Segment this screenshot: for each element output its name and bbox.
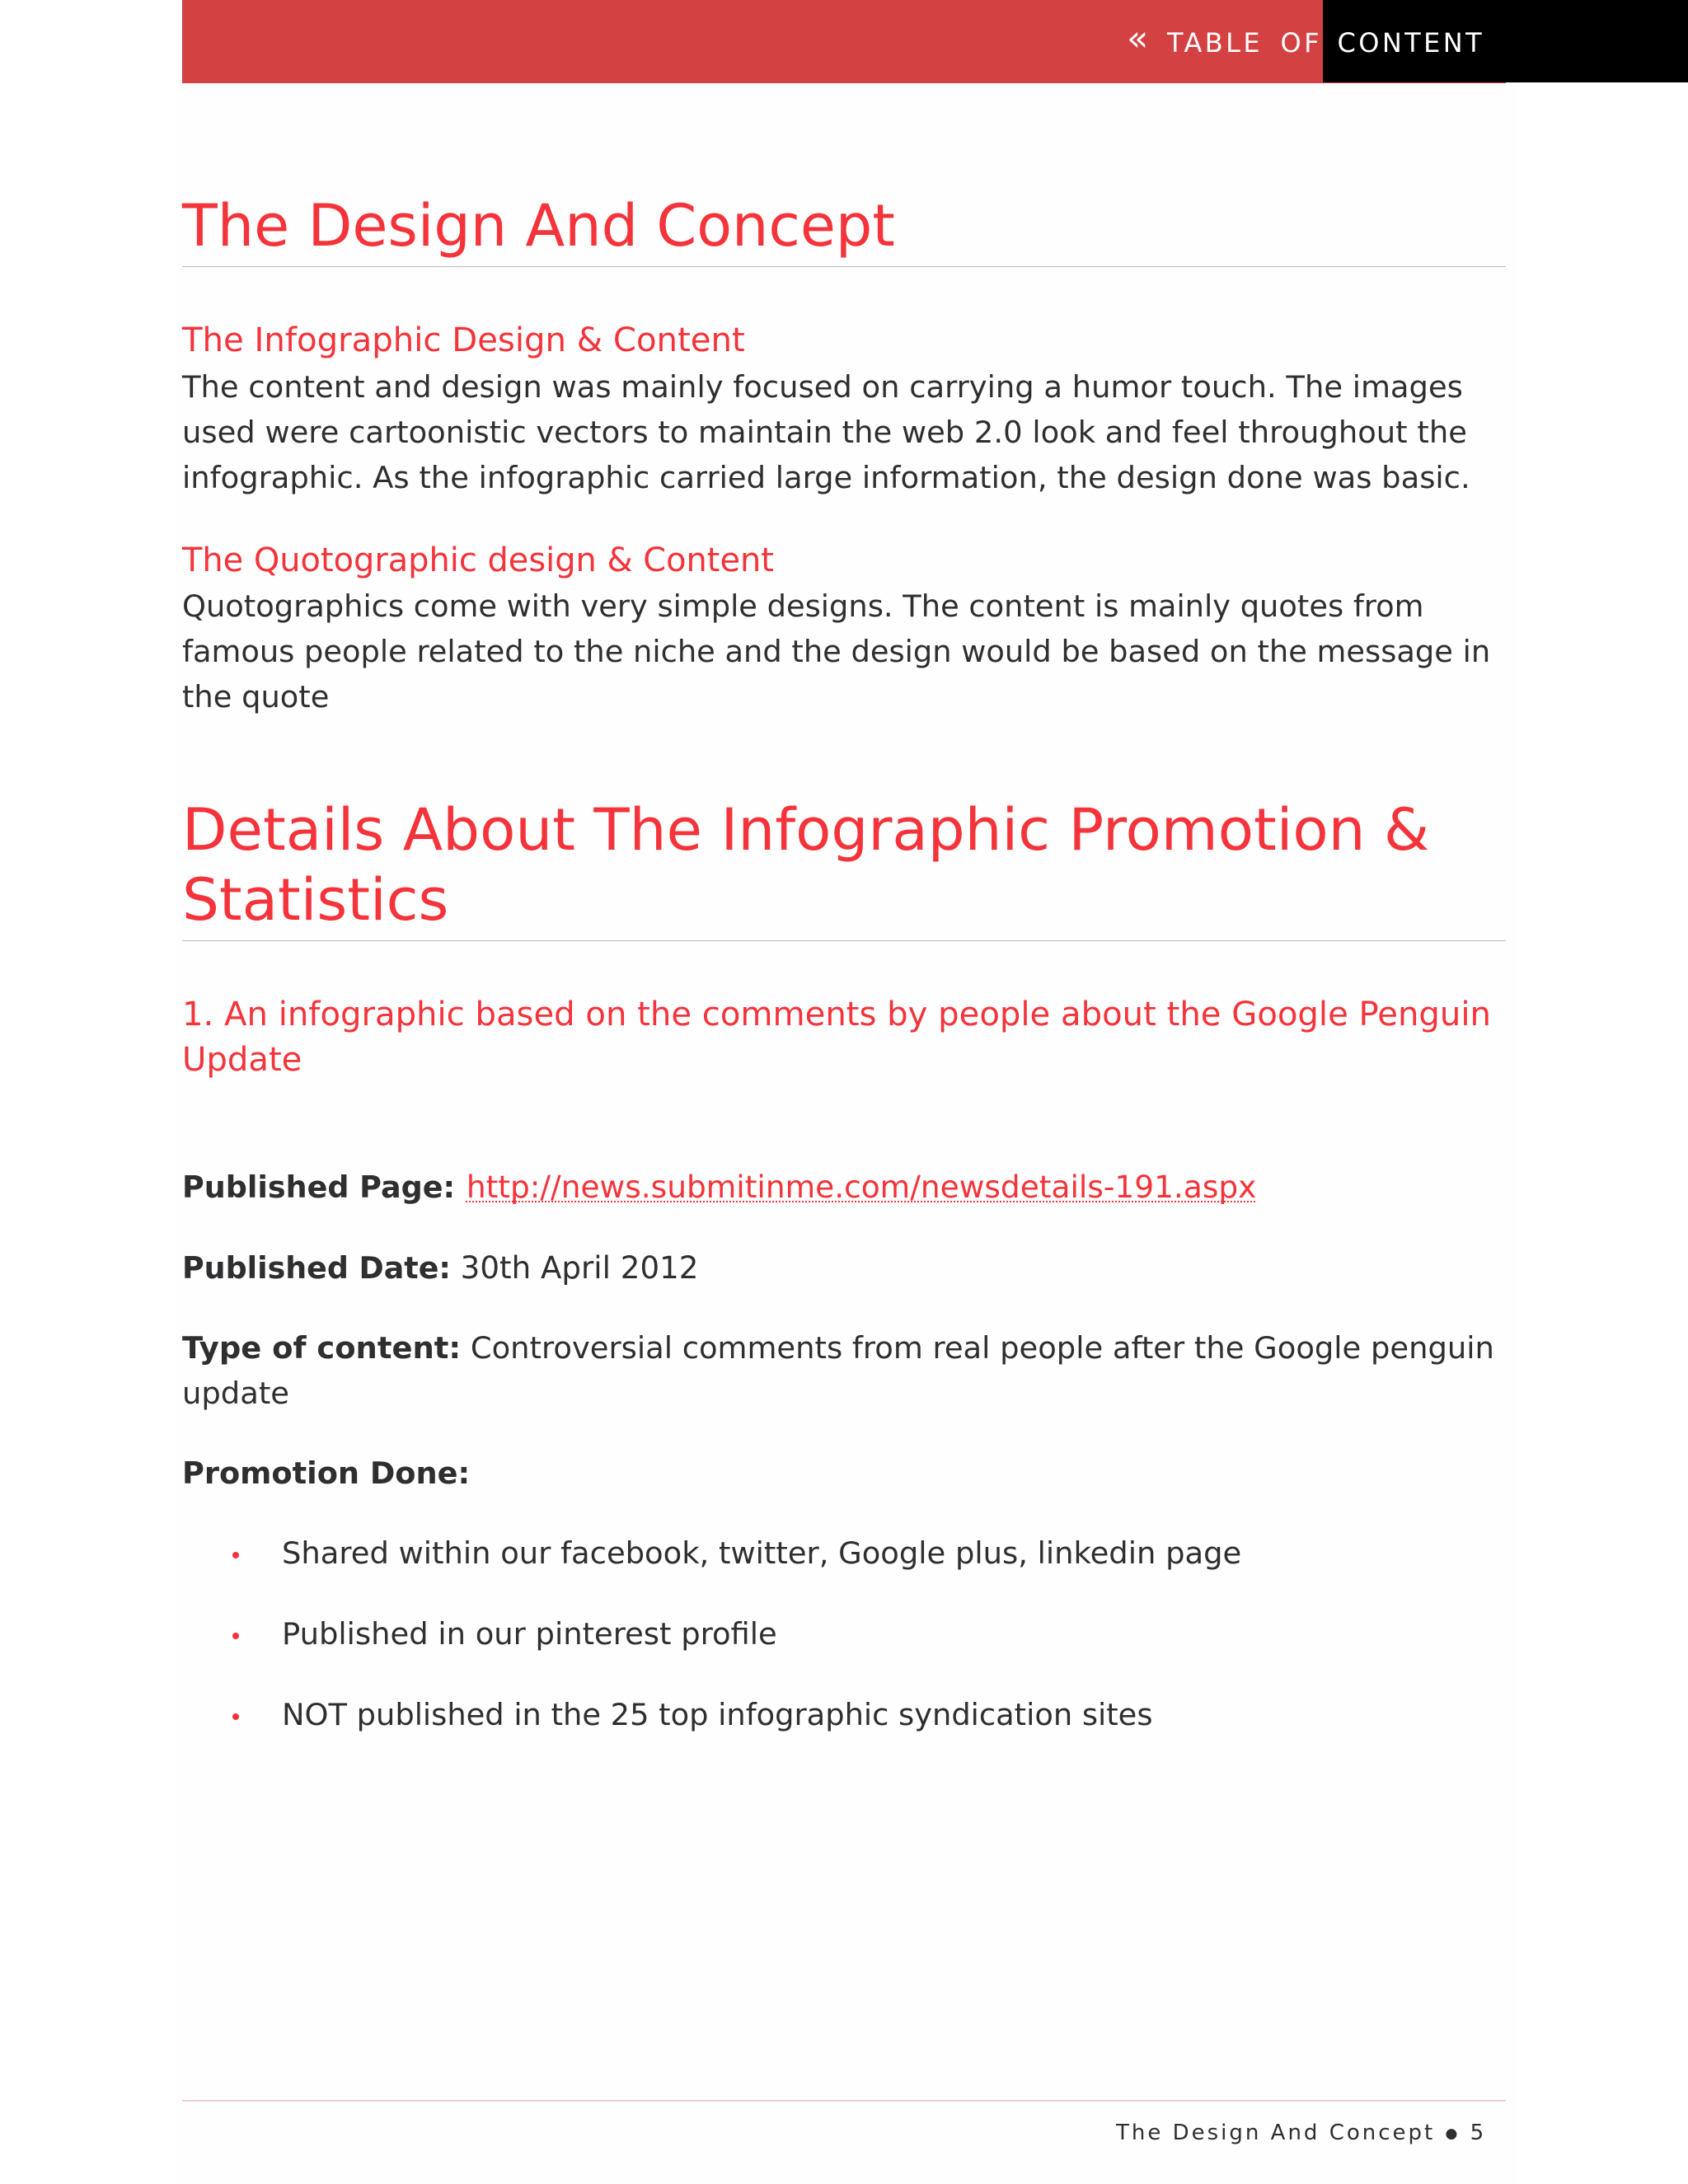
- subheading: The Infographic Design & Content: [182, 321, 745, 359]
- heading: The Design And Concept: The Design And Concept: [182, 192, 895, 260]
- footer page label: The Design And Concept ● 5: [1116, 2121, 1486, 2145]
- heading: details about promotion and statistics: [182, 795, 1429, 934]
- subheading: infographic 1: [182, 996, 1491, 1079]
- section: quotographic design: [181, 541, 1490, 715]
- paragraph: used were cartoonistic vectors to maintain the web 2.0 look and feel throughout the: [182, 415, 1467, 450]
- type of content: Type of content: Controversial comments from real people after the Google penguin: [182, 1330, 1494, 1366]
- subheading: The Quotographic design & Content: [182, 541, 774, 579]
- type of content: update: [182, 1376, 289, 1411]
- paragraph: [181, 369, 1470, 495]
- promotion list: [232, 1535, 1241, 1732]
- footer rule: [182, 2100, 1506, 2102]
- table of content link: TABLE OF CONTENT: [1167, 27, 1484, 59]
- list item 3: NOT published in the 25 top infographic syndication sites: [282, 1697, 1152, 1732]
- subheading: infographic 1: 1. An infographic based on the comments by people about the Google Penguin: [182, 996, 1491, 1033]
- header black block: [1323, 0, 1688, 82]
- paragraph: famous people related to the niche and the design would be based on the message in: [182, 634, 1490, 669]
- paragraph: the quote: [182, 679, 329, 715]
- page background panel: [175, 0, 1518, 2184]
- header red band: [182, 0, 1506, 83]
- heading: details about promotion and statistics: Statistics: [182, 865, 448, 934]
- list item 1: Shared within our facebook, twitter, Google plus, linkedin page: [282, 1535, 1241, 1571]
- paragraph: infographic. As the infographic carried large information, the design done was basic.: [182, 460, 1470, 495]
- paragraph: Quotographics come with very simple designs. The content is mainly quotes from: [182, 588, 1423, 624]
- published page: Published Page: http://news.submitinme.com/newsdetails-191.aspx: [182, 1169, 1256, 1205]
- type of content: [182, 1330, 1494, 1411]
- list item 2: Published in our pinterest profile: [282, 1616, 777, 1652]
- paragraph: [182, 588, 1490, 715]
- subheading: infographic 1: Update: [182, 1041, 302, 1079]
- icon: double chevron: «: [1127, 18, 1148, 59]
- header bar: [182, 0, 1688, 83]
- heading: details about promotion and statistics: Details About The Infographic Promotion &: [182, 795, 1429, 864]
- paragraph: The content and design was mainly focused on carrying a humor touch. The images: [182, 369, 1463, 405]
- published date: Published Date: 30th April 2012: [182, 1249, 698, 1286]
- section: infographic design: [181, 321, 1470, 495]
- promotion done label: Promotion Done:: [182, 1455, 470, 1491]
